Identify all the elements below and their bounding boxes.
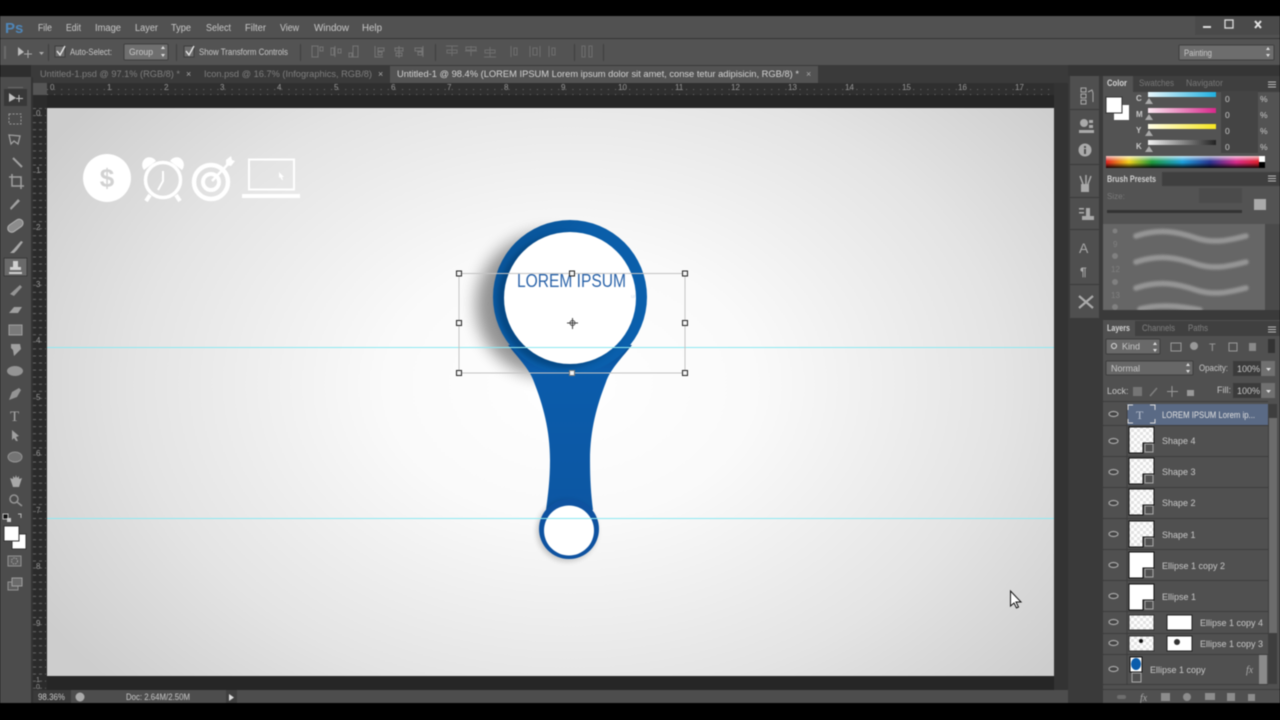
menu bar: Edit (66, 23, 81, 34)
brush preview list: 9 (1113, 240, 1118, 249)
tool: sponge (7, 366, 23, 376)
brush preview list: 13 (1111, 291, 1120, 300)
icon: character: A (1079, 240, 1089, 256)
rulers: 8 (36, 562, 41, 571)
layers tabs: Paths (1188, 323, 1208, 333)
layers footer buttons (1103, 689, 1280, 704)
menu bar: Help (362, 23, 382, 34)
layer: Ellipse 1 copy with effects: fx (1246, 665, 1254, 676)
icon: alarm clock (142, 157, 184, 201)
layers scrollbar (1259, 404, 1277, 684)
cursor (1010, 591, 1021, 608)
color panel tabs: Swatches (1139, 78, 1174, 88)
rulers: 8 (504, 83, 509, 92)
rulers: 0 (36, 109, 41, 118)
inner white circle (504, 232, 636, 364)
layer: Shape 2 (1129, 489, 1196, 515)
color panel tabs: Navigator (1186, 78, 1223, 88)
tool: dodge (11, 344, 21, 356)
menu bar: Select (206, 23, 231, 34)
document tabs: × (186, 69, 191, 79)
layer: Shape 4 (1129, 427, 1196, 453)
window controls (1195, 16, 1280, 35)
tool: type: T (10, 409, 19, 425)
rulers: 15 (902, 83, 911, 92)
layers tabs: Channels (1142, 323, 1175, 333)
icon: history (1081, 88, 1093, 104)
lock row: 100% (1237, 386, 1260, 396)
quick mask (8, 556, 21, 566)
canvas (47, 108, 1054, 676)
layer: Ellipse 1 copy 4 (1129, 615, 1263, 630)
lock row: Fill: (1217, 385, 1231, 395)
layer: text selected: LOREM IPSUM Lorem ip... (1162, 410, 1255, 420)
layer filter row: Kind (1122, 342, 1140, 352)
blend mode and opacity: Normal (1111, 364, 1140, 374)
layer: Ellipse 1 copy 2: Ellipse 1 copy 2 (1162, 561, 1225, 571)
rulers: 2 (36, 223, 41, 232)
rulers: 0 (36, 684, 40, 691)
tiny clipped white text on ring: ur (631, 294, 636, 300)
CMYK sliders: Y (1136, 126, 1142, 135)
rulers: 1 (107, 83, 112, 92)
blend mode and opacity: Opacity: (1199, 363, 1228, 373)
guides (47, 347, 1054, 519)
menu bar: Window (314, 23, 350, 34)
lock row (1107, 383, 1275, 398)
document tabs: Untitled-1.psd @ 97.1% (RGB/8) * (40, 69, 180, 80)
menu bar: Image (95, 23, 121, 34)
panel: brush presets: Size: (1107, 192, 1125, 201)
tool: brush (10, 241, 23, 253)
tool: history brush (10, 285, 22, 296)
rulers: 14 (845, 83, 854, 92)
CMYK inputs: % (1260, 94, 1268, 104)
tool: pen (9, 388, 21, 400)
rulers: 10 (618, 83, 627, 92)
rulers: 1 (36, 166, 41, 175)
menu bar: File (38, 23, 52, 34)
layer filter row: T (1209, 342, 1216, 354)
brush preview list (1103, 224, 1280, 310)
color panel tabs: Color (1107, 78, 1127, 88)
icon: target with arrow (194, 156, 235, 199)
layer: Ellipse 1 copy 4: Ellipse 1 copy 4 (1200, 618, 1263, 628)
tool: eraser (9, 307, 22, 313)
status bar (33, 690, 1068, 703)
left tools panel (0, 77, 33, 703)
rulers: 9 (561, 83, 566, 92)
layer: Ellipse 1 (1129, 584, 1196, 610)
screen mode (8, 578, 22, 590)
outer blue ring (493, 220, 647, 374)
rulers: 5 (36, 393, 41, 402)
CMYK sliders (1136, 92, 1216, 152)
CMYK inputs: 0 (1225, 142, 1230, 152)
layer filter row (1106, 339, 1275, 354)
document tabs: Icon.psd @ 16.7% (Infographics, RGB/8) (204, 69, 372, 80)
bottom black strip (0, 703, 1280, 720)
layer: Ellipse 1 copy 2 (1129, 552, 1225, 578)
workspace switcher: Painting: Painting (1184, 48, 1212, 58)
tool: zoom (10, 495, 22, 506)
pin graphic (476, 220, 647, 561)
layer: Shape 1 (1129, 521, 1196, 547)
layer: Ellipse 1 copy 3 (1129, 636, 1263, 651)
CMYK inputs: % (1260, 110, 1268, 120)
layer: text selected (1127, 404, 1268, 425)
panel: color (1103, 76, 1280, 172)
tool: healing brush (6, 218, 25, 234)
menu bar: Filter (245, 23, 267, 34)
blend mode and opacity (1106, 361, 1275, 376)
rulers: 0 (50, 83, 55, 92)
CMYK sliders: C (1136, 94, 1142, 103)
stem (508, 345, 632, 510)
small bottom ring (539, 499, 599, 559)
rulers: 5 (334, 83, 339, 92)
rulers: 17 (1015, 83, 1024, 92)
menu bar: Type (171, 23, 191, 34)
rulers: 12 (731, 83, 740, 92)
layers footer buttons: fx (1140, 693, 1148, 704)
menu bar: View (280, 23, 300, 34)
rulers: 6 (391, 83, 396, 92)
rulers: 13 (788, 83, 797, 92)
rulers: 2 (164, 83, 169, 92)
color panel tabs (1107, 78, 1276, 88)
tool: crop (9, 174, 24, 189)
layer: Shape 3: Shape 3 (1162, 467, 1196, 477)
document tabs: Untitled-1 @ 98.4% (LOREM IPSUM Lorem ipsum dolor sit amet, conse tetur adipisicin, RGB/8) * (397, 69, 799, 80)
icon: tools (1079, 296, 1093, 308)
panel: brush presets (1103, 172, 1280, 310)
eye icons (1109, 412, 1118, 672)
white icons row (83, 154, 300, 202)
icon: clone source (1079, 208, 1094, 220)
rulers: 3 (36, 280, 41, 289)
layer: text selected: T (1136, 408, 1144, 422)
status bar: 98.36% (38, 692, 65, 702)
menu bar: Layer (135, 23, 159, 34)
blend mode and opacity: 100% (1237, 364, 1260, 374)
tool: gradient (9, 325, 22, 335)
icon: 3d / properties (1079, 119, 1094, 133)
CMYK inputs (1221, 91, 1268, 153)
options bar: Group (129, 47, 153, 57)
document tabs (0, 65, 1068, 83)
icon: brushes (1080, 175, 1091, 192)
inner shading (497, 234, 631, 368)
heading: LOREM IPSUM: LOREM IPSUM (517, 271, 626, 291)
options bar: Auto-Select: (70, 47, 112, 57)
transform box (456, 271, 688, 376)
lock row: Lock: (1107, 386, 1129, 396)
CMYK inputs: 0 (1225, 94, 1230, 104)
rulers: 4 (277, 83, 282, 92)
tool: lasso (9, 135, 20, 144)
rulers: 7 (447, 83, 452, 92)
tool: ellipse (8, 452, 22, 462)
status bar: Doc: 2.64M/2.50M (126, 692, 190, 702)
layer: Shape 2: Shape 2 (1162, 498, 1196, 508)
icon: laptop (242, 160, 300, 198)
colour swatches (1106, 97, 1129, 120)
rulers: 3 (220, 83, 225, 92)
rulers: 11 (675, 83, 684, 92)
small bottom circle shadow (537, 501, 597, 561)
rulers: 1 (36, 677, 40, 684)
layer: Ellipse 1: Ellipse 1 (1162, 592, 1196, 602)
tool: hand (10, 475, 22, 487)
small white circle (544, 506, 594, 556)
workspace switcher: Painting (1179, 45, 1274, 60)
CMYK sliders: M (1136, 110, 1143, 119)
rulers: 9 (36, 619, 41, 628)
layer: Ellipse 1 copy 3: Ellipse 1 copy 3 (1200, 639, 1263, 649)
CMYK inputs: 0 (1225, 126, 1230, 136)
CMYK inputs: % (1260, 126, 1268, 136)
tool: clone stamp (4, 258, 27, 276)
icon: dollar coin: $ (100, 163, 115, 193)
menu bar: Ps (5, 20, 23, 37)
colour spectrum (1106, 156, 1265, 168)
CMYK inputs: 0 (1225, 110, 1230, 120)
panel: brush presets: Brush Presets (1107, 174, 1156, 184)
layers tabs: Layers (1107, 323, 1130, 333)
rulers: 4 (36, 336, 41, 345)
options bar (0, 39, 1280, 65)
tool: move (4, 89, 27, 106)
layer: Ellipse 1 copy with effects: Ellipse 1 copy (1150, 665, 1206, 675)
default colours icon (3, 514, 21, 522)
soft drop shadow (476, 233, 620, 377)
rulers: 6 (36, 449, 41, 458)
brush preview list: 12 (1111, 265, 1120, 274)
tool: eyedropper (10, 199, 20, 210)
icon: dollar coin (83, 154, 131, 202)
layer: Shape 4: Shape 4 (1162, 436, 1196, 446)
icon: paragraph: ¶ (1080, 265, 1087, 279)
right dock of collapsed panels (1068, 65, 1280, 703)
tool: magic wand (13, 158, 22, 167)
CMYK sliders: K (1136, 142, 1142, 151)
tool: marquee (9, 114, 21, 124)
menu bar (0, 16, 1280, 39)
rulers (33, 83, 1068, 703)
layer: Shape 1: Shape 1 (1162, 530, 1196, 540)
layers tabs (1107, 323, 1276, 333)
CMYK inputs: % (1260, 142, 1268, 152)
foreground and background swatches (4, 526, 26, 549)
layer: Ellipse 1 copy with effects (1130, 657, 1254, 682)
tool: path selection (12, 430, 19, 441)
panel: layers (1103, 310, 1280, 704)
document tabs: × (806, 69, 811, 79)
layer: Shape 3 (1129, 458, 1196, 484)
rulers: 7 (36, 506, 41, 515)
options bar: Show Transform Controls (199, 47, 288, 57)
rulers: 16 (958, 83, 967, 92)
document tabs: × (378, 69, 383, 79)
icon: info (1078, 144, 1092, 156)
